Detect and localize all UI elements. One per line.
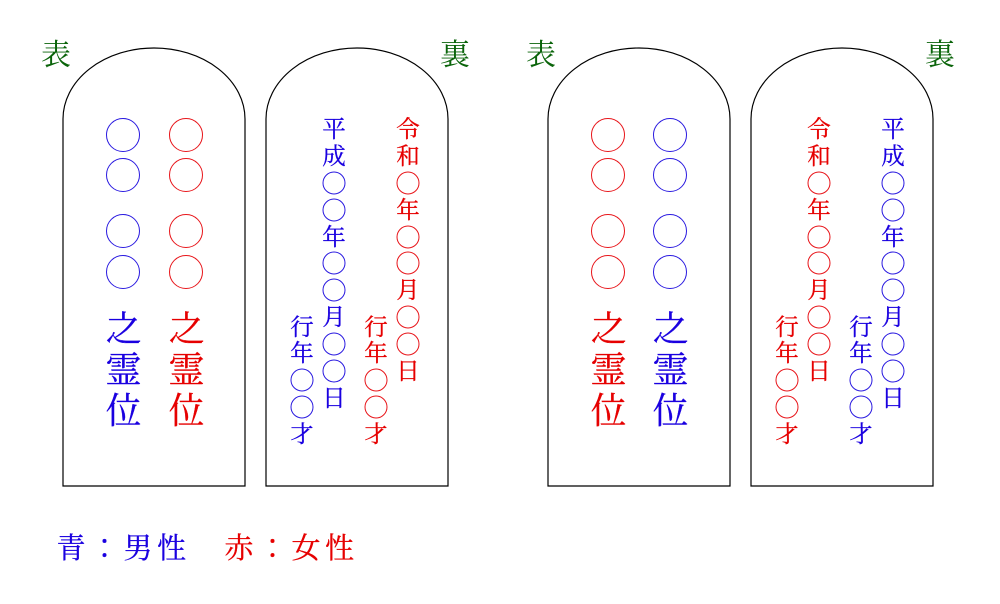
- red 之霊位 text: [168, 309, 205, 431]
- red death date column: 令: [396, 116, 420, 143]
- red age column: [775, 314, 799, 448]
- red death date column: 日: [396, 359, 420, 385]
- red age circles: [776, 369, 798, 418]
- panel: left pair back tablet: [266, 48, 448, 486]
- blue death date column: 平: [881, 116, 905, 143]
- red name circles: [170, 118, 202, 288]
- red age column: 行: [364, 314, 388, 341]
- blue date circles: [323, 172, 345, 382]
- blue death date column: 月: [881, 305, 905, 331]
- blue age column: [849, 314, 873, 448]
- red age column: 行: [775, 314, 799, 341]
- red age column: [364, 314, 388, 448]
- blue 之霊位 text: 霊: [105, 350, 142, 390]
- legend: red female: 赤：女性: [224, 532, 359, 565]
- label: back, left pair: 裏: [440, 39, 470, 72]
- blue 之霊位 text: [652, 309, 689, 431]
- red 之霊位 text: 之: [168, 309, 205, 349]
- blue age circles: [850, 369, 872, 418]
- red date circles: [808, 172, 830, 355]
- red death date column: 年: [396, 197, 420, 224]
- blue name circles: [106, 118, 140, 288]
- blue 之霊位 text: [105, 309, 142, 431]
- red death date column: [396, 116, 420, 385]
- label: back, right pair: 裏: [925, 39, 955, 72]
- blue death date column: 成: [881, 143, 905, 170]
- red age column: 才: [364, 421, 388, 448]
- blue death date column: [322, 116, 346, 412]
- tablet outline: [548, 48, 730, 486]
- red death date column: 和: [807, 143, 831, 170]
- blue age column: 行: [290, 314, 314, 341]
- panel: left pair front tablet: [63, 48, 245, 486]
- legend: [56, 532, 359, 565]
- red age circles: [365, 369, 387, 418]
- blue age column: 才: [849, 421, 873, 448]
- blue age column: [290, 314, 314, 448]
- red age column: 才: [775, 421, 799, 448]
- blue death date column: 成: [322, 143, 346, 170]
- blue name circles: [654, 118, 686, 288]
- blue death date column: 年: [322, 224, 346, 251]
- label: front, left pair: 表: [41, 39, 71, 72]
- red 之霊位 text: 霊: [590, 350, 627, 390]
- red age column: 年: [364, 340, 388, 367]
- label: front, right pair: 表: [526, 39, 556, 72]
- red death date column: 和: [396, 143, 420, 170]
- red age column: 年: [775, 340, 799, 367]
- red death date column: 令: [807, 116, 831, 143]
- panel: right pair back tablet: [751, 48, 933, 486]
- blue death date column: 年: [881, 224, 905, 251]
- tablet outline: [63, 48, 245, 486]
- red 之霊位 text: 位: [590, 391, 627, 431]
- tablet outline: [751, 48, 933, 486]
- red 之霊位 text: 位: [168, 391, 205, 431]
- red name circles: [592, 118, 624, 288]
- blue death date column: 日: [881, 386, 905, 412]
- blue 之霊位 text: 位: [652, 391, 689, 431]
- tablet outline: [266, 48, 448, 486]
- red date circles: [397, 172, 419, 355]
- blue date circles: [882, 172, 904, 382]
- blue 之霊位 text: 位: [105, 391, 142, 431]
- red 之霊位 text: 霊: [168, 350, 205, 390]
- blue death date column: [881, 116, 905, 412]
- blue death date column: 月: [322, 305, 346, 331]
- blue death date column: 日: [322, 386, 346, 412]
- red 之霊位 text: 之: [590, 309, 627, 349]
- blue age column: 年: [849, 340, 873, 367]
- red death date column: 月: [807, 278, 831, 304]
- blue age column: 年: [290, 340, 314, 367]
- blue 之霊位 text: 之: [652, 309, 689, 349]
- red death date column: 日: [807, 359, 831, 385]
- red death date column: 年: [807, 197, 831, 224]
- blue 之霊位 text: 霊: [652, 350, 689, 390]
- legend: blue male: 青：男性: [56, 532, 191, 565]
- red 之霊位 text: [590, 309, 627, 431]
- blue death date column: 平: [322, 116, 346, 143]
- panel: right pair front tablet: [548, 48, 730, 486]
- red death date column: [807, 116, 831, 385]
- red death date column: 月: [396, 278, 420, 304]
- blue age column: 行: [849, 314, 873, 341]
- blue 之霊位 text: 之: [105, 309, 142, 349]
- blue age circles: [291, 369, 313, 418]
- blue age column: 才: [290, 421, 314, 448]
